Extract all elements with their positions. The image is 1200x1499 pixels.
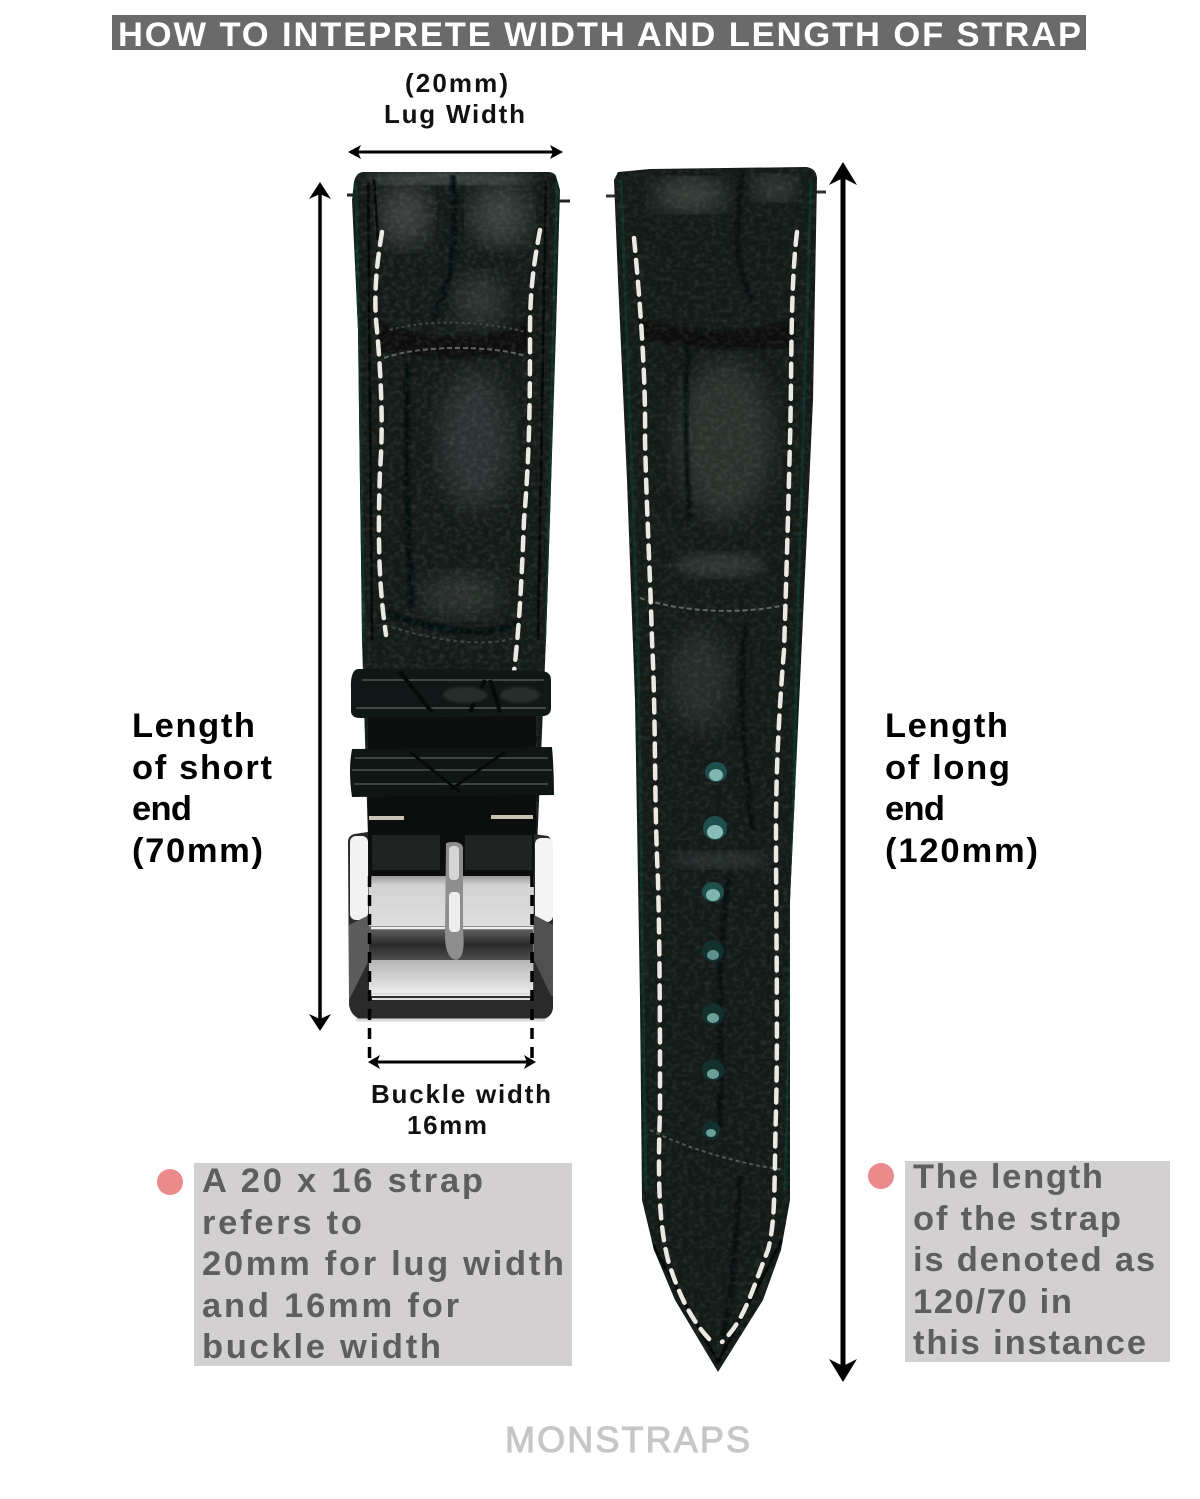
callout: strap length xyxy=(905,1158,1170,1362)
callout: strap size: refers to xyxy=(202,1204,362,1242)
label: length of short end: end xyxy=(132,790,192,828)
buckle upper plate xyxy=(369,876,533,926)
callout: strap length: The length xyxy=(913,1158,1103,1196)
buckle frame xyxy=(348,832,553,1020)
label: lug width xyxy=(384,68,525,129)
leather highlights under keepers xyxy=(372,835,532,870)
label: lug width: (20mm) xyxy=(405,68,508,98)
label: length of short end: (70mm) xyxy=(132,832,263,870)
arrow: short end length xyxy=(309,182,331,1031)
arrow: long end length xyxy=(829,162,857,1382)
short strap xyxy=(347,172,570,834)
stitching: long strap right xyxy=(722,232,797,1342)
stitching: short strap right xyxy=(514,230,540,672)
label: lug width: Lug Width xyxy=(384,99,525,129)
label: length of short end xyxy=(132,707,272,870)
stitching: short strap left xyxy=(375,232,386,635)
label: length of long end: of long xyxy=(885,749,1010,787)
label: length of long end: (120mm) xyxy=(885,832,1038,870)
label: length of long end: Length xyxy=(885,707,1008,745)
logo: MONSTRAPS xyxy=(505,1419,750,1460)
stitching: long strap left xyxy=(634,238,712,1342)
arrow: buckle width xyxy=(368,1055,536,1069)
title: HOW TO INTEPRETE WIDTH AND LENGTH OF STRAP xyxy=(118,16,1081,54)
callout: strap size: A 20 x 16 strap xyxy=(202,1162,483,1200)
buckle xyxy=(348,832,553,1020)
callout: strap length: this instance xyxy=(913,1324,1146,1362)
label: length of long end: end xyxy=(885,790,945,828)
arrow: lug width xyxy=(348,145,563,159)
buckle lower plate xyxy=(369,960,533,996)
callout: strap length: of the strap xyxy=(913,1200,1121,1238)
label: length of long end xyxy=(885,707,1038,870)
callout: strap size: 20mm for lug width xyxy=(202,1245,564,1283)
label: length of short end: Length xyxy=(132,707,255,745)
bullet: length note xyxy=(868,1163,894,1189)
lower keeper xyxy=(350,747,554,797)
strap holes xyxy=(702,762,727,1139)
buckle cross bar xyxy=(369,926,533,960)
label: buckle width: 16mm xyxy=(407,1110,487,1140)
label: buckle width: Buckle width xyxy=(371,1079,551,1109)
upper keeper xyxy=(351,669,551,718)
spring bar: long strap xyxy=(606,192,826,196)
long strap xyxy=(600,160,830,1380)
thread xyxy=(369,817,533,818)
callout: strap size: buckle width xyxy=(202,1328,441,1366)
dashed guides: buckle width xyxy=(370,876,532,1060)
callout: strap length: is denoted as xyxy=(913,1241,1155,1279)
spring bar: short strap xyxy=(347,195,570,201)
label: buckle width xyxy=(371,1079,551,1140)
callout: strap size xyxy=(194,1162,572,1366)
buckle base xyxy=(349,996,553,1019)
keeper loops and buckle xyxy=(348,669,554,1020)
label: length of short end: of short xyxy=(132,749,272,787)
bullet: strap size note xyxy=(157,1169,183,1195)
leather: long strap xyxy=(614,167,817,1372)
leather: short strap xyxy=(352,172,560,834)
buckle pin xyxy=(445,842,464,960)
callout: strap length: 120/70 in xyxy=(913,1283,1072,1321)
dark strap under keepers xyxy=(368,716,536,876)
callout: strap size: and 16mm for xyxy=(202,1287,459,1325)
